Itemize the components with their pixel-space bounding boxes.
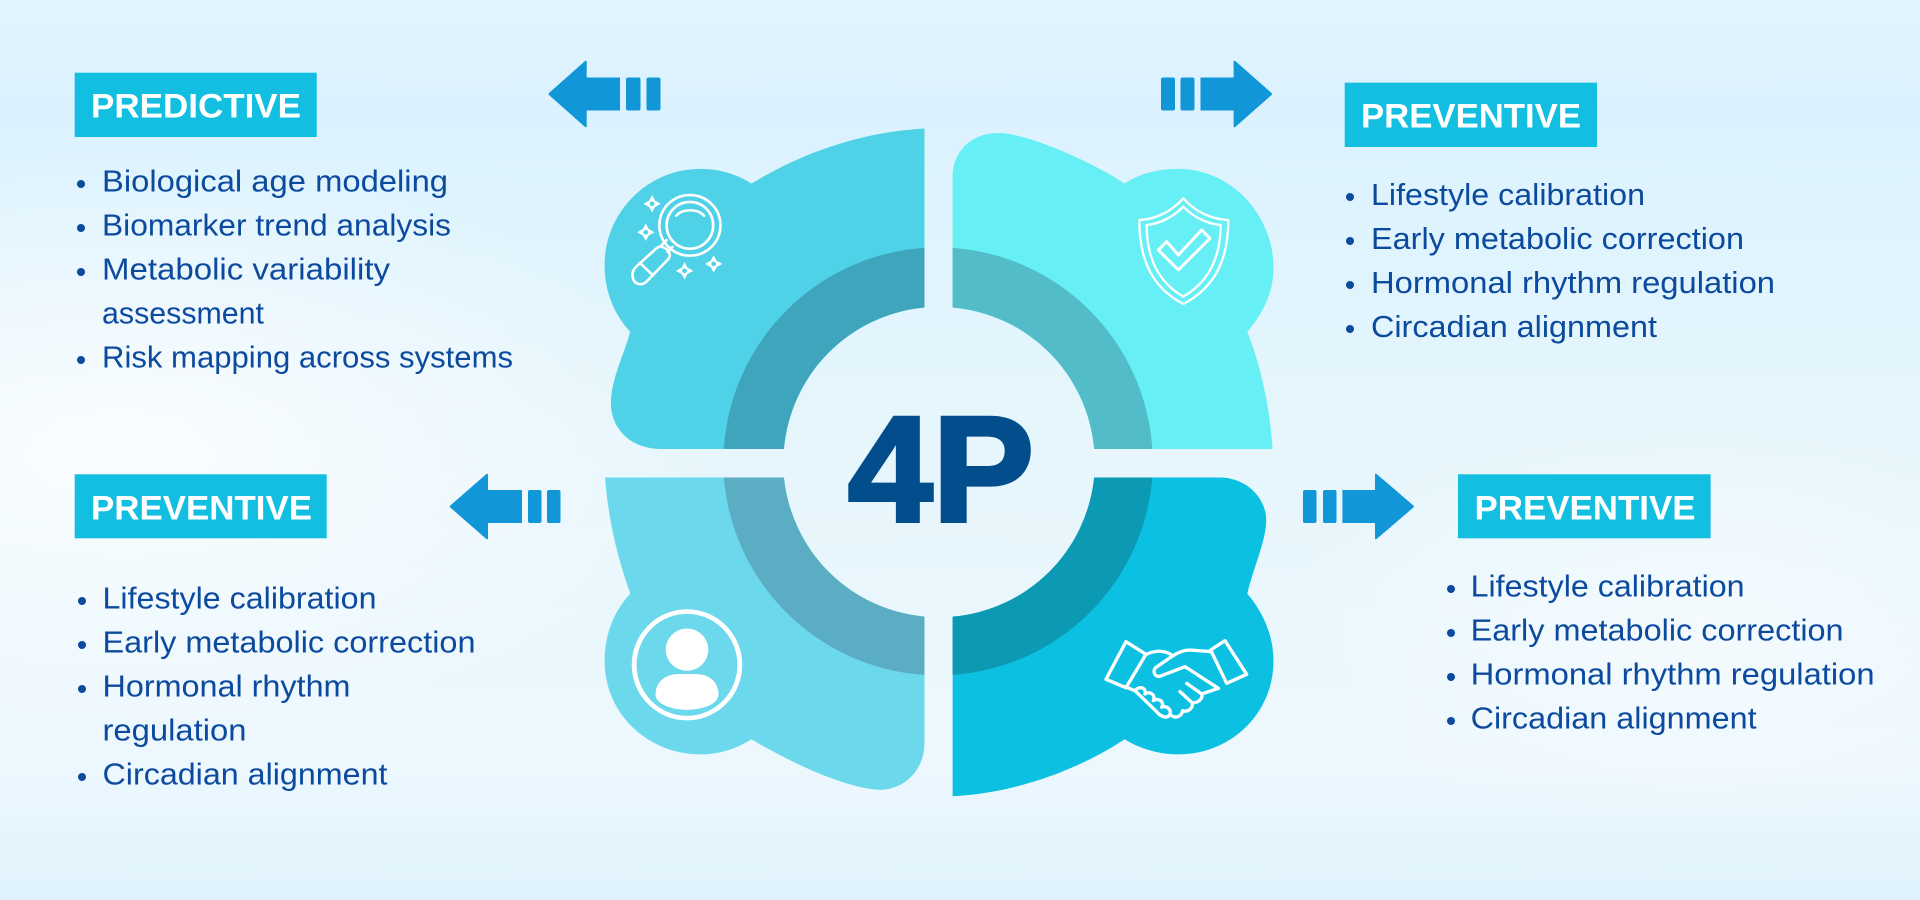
list: predictive items: assessment [102,296,264,330]
list: preventive bottom right items: Early metabolic correction [1471,613,1844,648]
list: preventive top right items: Early metabolic correction [1371,221,1744,256]
list: preventive bottom left items: regulation [102,713,246,748]
blade: top-right quadrant [953,133,1273,449]
center label 4P: 4P [848,385,1034,553]
4P quadrant diagram [605,128,1273,796]
panel: predictive [75,73,513,374]
list: preventive top right items [1346,177,1775,344]
list: preventive bottom left items: Lifestyle calibration [102,581,376,616]
heading: preventive bottom right [1458,474,1711,538]
blade: top-left quadrant [605,128,924,449]
list: preventive bottom left items [78,581,476,792]
icon: shield with check [1139,198,1228,304]
list: preventive bottom right items: Lifestyle calibration [1471,569,1745,604]
heading: preventive top right: PREVENTIVE [1361,98,1581,136]
list: preventive bottom right items [1447,569,1875,736]
icon: handshake [1106,641,1247,717]
list: predictive items [77,164,513,374]
heading: preventive bottom left [75,474,327,538]
heading: predictive: PREDICTIVE [91,88,301,126]
arrow: preventive bottom left [450,474,560,539]
list: preventive bottom right items: Circadian alignment [1471,701,1757,736]
list: preventive top right items: Hormonal rhythm regulation [1371,265,1775,300]
list: preventive bottom right items: Hormonal rhythm regulation [1471,657,1875,692]
icon: magnifying glass [632,195,722,284]
list: predictive items: Biomarker trend analysis [102,208,451,242]
list: preventive bottom left items: Hormonal rhythm [102,669,350,704]
panel: preventive bottom left [75,474,475,792]
ring segment: top-left [724,248,924,449]
arrow: preventive top right [1161,61,1272,127]
heading: preventive top right [1345,83,1597,147]
heading: predictive [75,73,317,137]
list: preventive top right items: Circadian alignment [1371,309,1657,344]
arrow: preventive bottom right [1303,474,1414,539]
heading: preventive bottom right: PREVENTIVE [1474,489,1696,527]
icon: person in circle [634,612,740,718]
ring segment: top-right [953,248,1152,449]
blade: bottom-right quadrant [953,477,1273,796]
list: predictive items: Risk mapping across systems [102,340,513,374]
panel: preventive bottom right [1447,474,1875,736]
heading: preventive bottom left: PREVENTIVE [91,489,312,527]
arrow: predictive [548,61,660,127]
list: preventive bottom left items: Circadian alignment [102,756,388,792]
ring segment: bottom-right [953,477,1152,675]
list: predictive items: Biological age modeling [102,164,448,199]
panel: preventive top right [1345,83,1775,344]
list: preventive bottom left items: Early metabolic correction [102,625,476,660]
ring segment: bottom-left [724,477,924,675]
list: predictive items: Metabolic variability [102,252,391,286]
blade: bottom-left quadrant [605,477,924,790]
list: preventive top right items: Lifestyle calibration [1371,177,1645,212]
